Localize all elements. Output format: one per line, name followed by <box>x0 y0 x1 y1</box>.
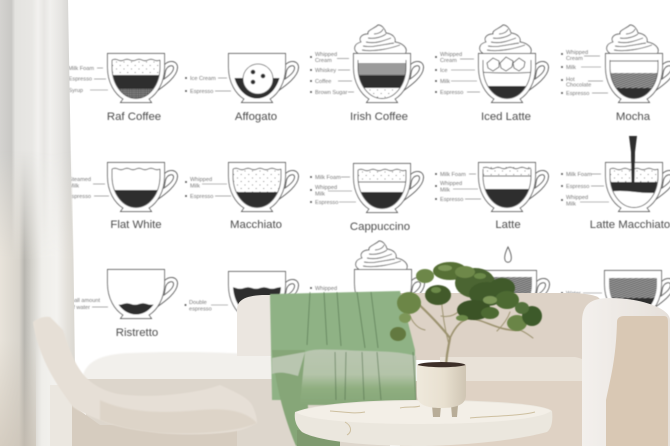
cup: Cappuccino <box>310 164 424 233</box>
cup: Latte Macchiato: Latte Macchiato <box>590 219 670 231</box>
cup: Ristretto: of water <box>70 305 90 311</box>
chair shell <box>33 317 257 434</box>
cup: Affogato: Affogato <box>235 111 277 123</box>
cup: Cappuccino: Espresso <box>315 200 338 206</box>
cup: Latte: Milk Foam <box>440 172 466 178</box>
blanket pale highlight <box>272 352 305 376</box>
cup: Mocha <box>561 25 670 123</box>
cup: water drink: Water <box>566 291 581 297</box>
cup: whipped cream drink <box>310 241 425 318</box>
cup: Mocha: Chocolate <box>566 82 591 88</box>
cup: Irish Coffee: Cream <box>315 58 332 64</box>
cup: Raf Coffee: Milk Foam <box>68 66 94 72</box>
table top <box>295 400 552 446</box>
cup: Flat White: Steamed <box>69 177 91 183</box>
cup: Macchiato: Whipped <box>190 177 212 183</box>
cup: Irish Coffee: Irish Coffee <box>350 111 408 123</box>
cup: Affogato: Espresso <box>190 89 213 95</box>
chair base <box>72 405 237 446</box>
cup: Double espresso: espresso <box>189 306 212 312</box>
cup: Iced Latte: Cream <box>440 58 457 64</box>
cup: water drink <box>560 269 670 307</box>
cup: Iced Latte: Espresso <box>440 90 463 96</box>
cup: Macchiato: Espresso <box>190 194 213 200</box>
sofa base <box>86 379 390 446</box>
cup: Mocha: Espresso <box>566 91 589 97</box>
cup: Iced Latte <box>435 25 549 123</box>
sofa left cushion <box>82 352 275 380</box>
cup: whipped cream drink: Whipped <box>315 286 337 292</box>
cup: Macchiato: Macchiato <box>230 219 282 231</box>
cup: Iced Latte: Milk <box>440 79 450 85</box>
cup: Cappuccino: Milk Foam <box>315 175 341 181</box>
plant branches <box>408 295 533 365</box>
sofa seat <box>440 357 605 381</box>
marble table <box>295 400 552 446</box>
blanket left drape <box>272 350 310 446</box>
cup: Ristretto: Small amount <box>66 298 100 304</box>
chair leg <box>50 385 72 446</box>
table surface <box>296 401 551 424</box>
cup: Latte Macchiato: Espresso <box>566 184 589 190</box>
sofa left arm <box>237 295 290 356</box>
cup: Mocha: Mocha <box>616 111 651 123</box>
cup: Cappuccino: Milk <box>315 192 325 198</box>
pot soil <box>418 362 466 368</box>
cup: Affogato: Ice Cream <box>190 76 216 82</box>
cup: Mocha: Cream <box>566 56 583 62</box>
cup: Irish Coffee: Coffee <box>315 79 331 85</box>
green blanket <box>270 291 416 446</box>
cup: Latte: Espresso <box>440 197 463 203</box>
sofa seat front <box>400 381 606 446</box>
cup: Raf Coffee: Raf Coffee <box>107 111 161 123</box>
cup: Iced Latte: Iced Latte <box>481 111 531 123</box>
marble veins <box>330 406 535 435</box>
cup: Flat White: Milk <box>69 184 79 190</box>
blanket folds <box>307 292 416 400</box>
cup: Latte Macchiato <box>561 136 670 231</box>
cup: Ristretto <box>66 270 178 339</box>
cup: Iced Latte: Whipped <box>440 52 462 58</box>
coffee chart <box>66 25 670 339</box>
cup: Latte: Whipped <box>440 181 462 187</box>
cup: Irish Coffee <box>310 25 424 123</box>
cup: Irish Coffee: Whiskey <box>315 68 336 74</box>
pot feet <box>432 405 458 417</box>
chair <box>33 317 257 446</box>
cup: Flat White <box>68 162 178 231</box>
cup: Ristretto: Ristretto <box>116 327 158 339</box>
sofa <box>82 293 670 446</box>
sofa back <box>400 293 600 360</box>
blanket upper <box>270 291 415 400</box>
cup: Latte Macchiato: Milk <box>566 202 576 208</box>
cup: Irish Coffee: Whipped <box>315 52 337 58</box>
cup: Double espresso <box>184 270 300 312</box>
cup: Latte: Latte <box>495 219 521 231</box>
cup: Mocha: Whipped <box>566 50 588 56</box>
cup: drop drink <box>482 246 551 293</box>
cup: Flat White: Flat White <box>110 219 162 231</box>
cup: Cappuccino: Cappuccino <box>350 221 410 233</box>
cup: Raf Coffee: Espresso <box>69 76 92 82</box>
sofa right arm <box>582 298 670 446</box>
table underside <box>297 430 340 446</box>
plant leaves <box>390 262 542 341</box>
cup: Raf Coffee <box>68 54 178 123</box>
sofa arm front panel <box>606 316 668 446</box>
blanket lower fold <box>300 350 416 405</box>
cup: Affogato <box>185 54 299 123</box>
cup: Macchiato: Milk <box>190 184 200 190</box>
cup: Latte Macchiato: Whipped <box>566 195 588 201</box>
cup: Mocha: Milk <box>566 65 576 71</box>
pot body <box>417 365 466 408</box>
cup: Irish Coffee: Brown Sugar <box>315 90 347 96</box>
cup: Iced Latte: Ice <box>440 68 447 74</box>
chair shell front edge <box>100 400 257 434</box>
cup: Mocha: Hot <box>566 77 575 83</box>
potted plant <box>390 262 542 417</box>
cup: Latte <box>435 162 549 231</box>
cup: Double espresso: Double <box>189 300 207 306</box>
cup: Latte: Milk <box>440 188 450 194</box>
cup: Flat White: Espresso <box>68 194 91 200</box>
cup: Latte Macchiato: Milk Foam <box>566 172 592 178</box>
cup: Macchiato <box>185 162 299 231</box>
cup: Raf Coffee: Syrup <box>68 88 83 94</box>
curtain <box>0 0 76 446</box>
cup: Cappuccino: Whipped <box>315 185 337 191</box>
